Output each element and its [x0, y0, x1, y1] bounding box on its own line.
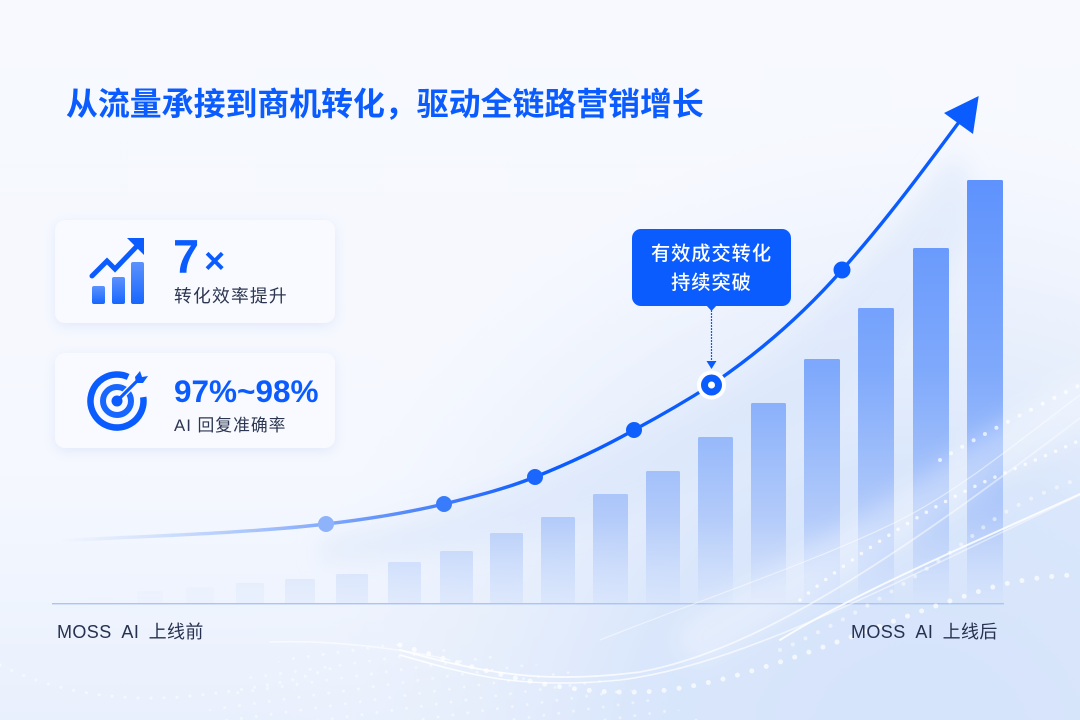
panel: conversion efficiency [55, 220, 335, 323]
glow under growth curve [320, 150, 985, 560]
baseline [52, 603, 1004, 604]
axis label: after: MOSS AI 上线后 [851, 622, 998, 642]
icon: growth bars [90, 238, 144, 304]
callout: 有效成交转化 [651, 244, 772, 265]
axis label: before: MOSS AI 上线前 [57, 622, 204, 642]
curve points [318, 262, 850, 532]
stat label: AI 回复准确率 [174, 416, 286, 435]
panel: reply accuracy [55, 353, 335, 448]
highlighted point [697, 370, 726, 400]
callout: 持续突破 [671, 273, 752, 294]
stat label: 转化效率提升 [174, 286, 288, 306]
bar chart [88, 180, 1003, 603]
title: 从流量承接到商机转化，驱动全链路营销增长 [66, 86, 704, 122]
stat value: 97%~98% [174, 373, 318, 409]
arrow head [944, 96, 979, 134]
growth curve [50, 96, 979, 541]
callout [632, 229, 791, 306]
stat value: 7× [173, 230, 225, 283]
icon: target [87, 371, 148, 431]
callout connector [706, 304, 717, 369]
white ribbons and dotted waves over bars [0, 385, 1080, 698]
